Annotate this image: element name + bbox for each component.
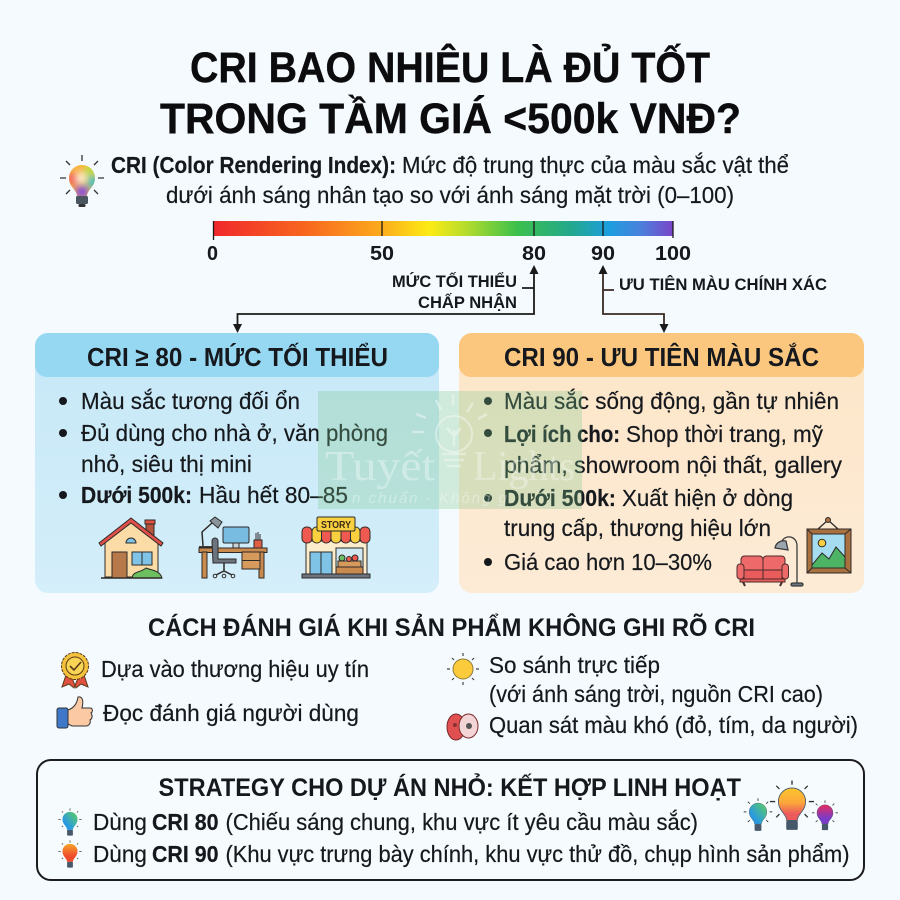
panel header: CRI 90: CRI 90 - ƯU TIÊN MÀU SẮC: [504, 342, 819, 372]
icon: storefront: [302, 517, 370, 578]
bullet list: CRI 80: Hầu hết 80–85: [199, 482, 348, 508]
bullet list: CRI 80: Màu sắc tương đối ổn: [81, 388, 300, 414]
panel header: CRI 80: CRI ≥ 80 - MỨC TỐI THIỂU: [87, 342, 388, 372]
bullet list: CRI 90: Shop thời trang, mỹ: [626, 421, 823, 447]
bullet list: CRI 90: phẩm, showroom nội thất, gallery: [504, 452, 842, 478]
strategy line: CRI 90: CRI 90: [152, 841, 218, 867]
icon: three coloured bulbs: [744, 781, 838, 831]
bullet list: CRI 90: Màu sắc sống động, gần tự nhiên: [504, 388, 839, 414]
panel: CRI 80 minimum: [35, 333, 439, 593]
arrow: CRI 90 to colour panel: [598, 265, 668, 333]
strategy line: CRI 80: Dùng: [93, 809, 147, 835]
CRI definition text: Mức độ trung thực của màu sắc vật thể: [402, 152, 789, 178]
bullet list: CRI 90: Giá cao hơn 10–30%: [504, 549, 712, 575]
title: [160, 43, 741, 143]
panel: strategy box: [37, 760, 864, 880]
icon: rainbow light bulb: [60, 155, 104, 207]
icon: medal: [62, 652, 88, 688]
icon: house: [99, 518, 163, 578]
icon: thumbs up: [57, 697, 92, 728]
icon: sun: [447, 653, 479, 685]
scale labels: 0: [207, 243, 218, 265]
icon: framed picture: [807, 518, 851, 573]
watermark: Tuyết Lights: Lights: [473, 444, 575, 490]
scale labels: 90: [591, 243, 615, 265]
strategy line: CRI 80: [58, 808, 698, 836]
icon: floor lamp: [775, 537, 803, 586]
title: CRI BAO NHIÊU LÀ ĐỦ TỐT: [190, 43, 710, 92]
item: trusted brand: Dựa vào thương hiệu uy tín: [101, 656, 369, 682]
CRI definition text: dưới ánh sáng nhân tạo so với ánh sáng mặt trời (0–100): [166, 182, 734, 208]
panel header: CRI 80: [35, 333, 439, 377]
icon: office desk: [199, 517, 267, 578]
bullet list: CRI 80: nhỏ, siêu thị mini: [81, 451, 252, 477]
callout: colour accuracy priority: ƯU TIÊN MÀU CHÍNH XÁC: [619, 275, 827, 294]
watermark: Tuyết Lights: [318, 391, 582, 509]
bullet list: CRI 90: Xuất hiện ở dòng: [622, 485, 793, 511]
CRI scale bar: [207, 221, 691, 265]
scale labels: [207, 243, 691, 265]
section heading: evaluation: CÁCH ĐÁNH GIÁ KHI SẢN PHẨM KHÔNG GHI RÕ CRI: [148, 612, 755, 642]
strategy line: CRI 80: (Chiếu sáng chung, khu vực ít yêu cầu màu sắc): [226, 809, 698, 835]
bullet list: CRI 90: Dưới 500k:: [504, 485, 616, 511]
scale labels: 80: [522, 243, 546, 265]
icon: storefront: STORY: [321, 520, 351, 531]
strategy line: CRI 90: (Khu vực trưng bày chính, khu vực thử đồ, chụp hình sản phẩm): [226, 841, 850, 867]
strategy heading: STRATEGY CHO DỰ ÁN NHỎ: KẾT HỢP LINH HOẠT: [158, 772, 741, 802]
bullet list: CRI 90: trung cấp, thương hiệu lớn: [504, 515, 771, 541]
icon: sofa: [737, 556, 788, 586]
item: direct comparison: (với ánh sáng trời, nguồn CRI cao): [489, 681, 823, 707]
watermark: Tuyết Lights: n chuẩn - Không g: [352, 490, 508, 507]
item: difficult colours: Quan sát màu khó (đỏ, tím, da người): [489, 712, 858, 738]
item: trusted brand: [62, 652, 369, 688]
item: direct comparison: So sánh trực tiếp: [489, 652, 660, 678]
CRI definition text: CRI (Color Rendering Index):: [111, 152, 396, 178]
bullet list: CRI 80: Dưới 500k:: [81, 482, 192, 508]
arrow: CRI 80 to minimum panel: [233, 265, 538, 333]
panel: CRI 90 colour priority: [459, 333, 864, 593]
callout: minimum acceptable: MỨC TỐI THIỂU: [392, 271, 517, 291]
scale labels: 100: [655, 243, 691, 265]
item: user reviews: [57, 697, 359, 728]
icon: colour swatches: [447, 714, 478, 740]
callout: minimum acceptable: [392, 271, 517, 312]
strategy line: CRI 80: CRI 80: [152, 809, 218, 835]
strategy line: CRI 90: Dùng: [93, 841, 147, 867]
bullet list: CRI 80: Đủ dùng cho nhà ở, văn phòng: [81, 420, 388, 446]
item: user reviews: Đọc đánh giá người dùng: [103, 700, 359, 726]
bullet list: CRI 80: [59, 388, 388, 508]
scale labels: 50: [370, 243, 394, 265]
watermark: Tuyết Lights: Tuyết: [325, 444, 435, 490]
CRI definition text: [111, 152, 789, 208]
bullet list: CRI 90: [484, 388, 842, 575]
item: direct comparison: [447, 652, 823, 707]
callout: minimum acceptable: CHẤP NHẬN: [418, 293, 517, 312]
bullet list: CRI 90: Lợi ích cho:: [504, 421, 620, 447]
title: TRONG TẦM GIÁ <500k VNĐ?: [160, 95, 741, 143]
panel header: CRI 90: [459, 333, 864, 377]
